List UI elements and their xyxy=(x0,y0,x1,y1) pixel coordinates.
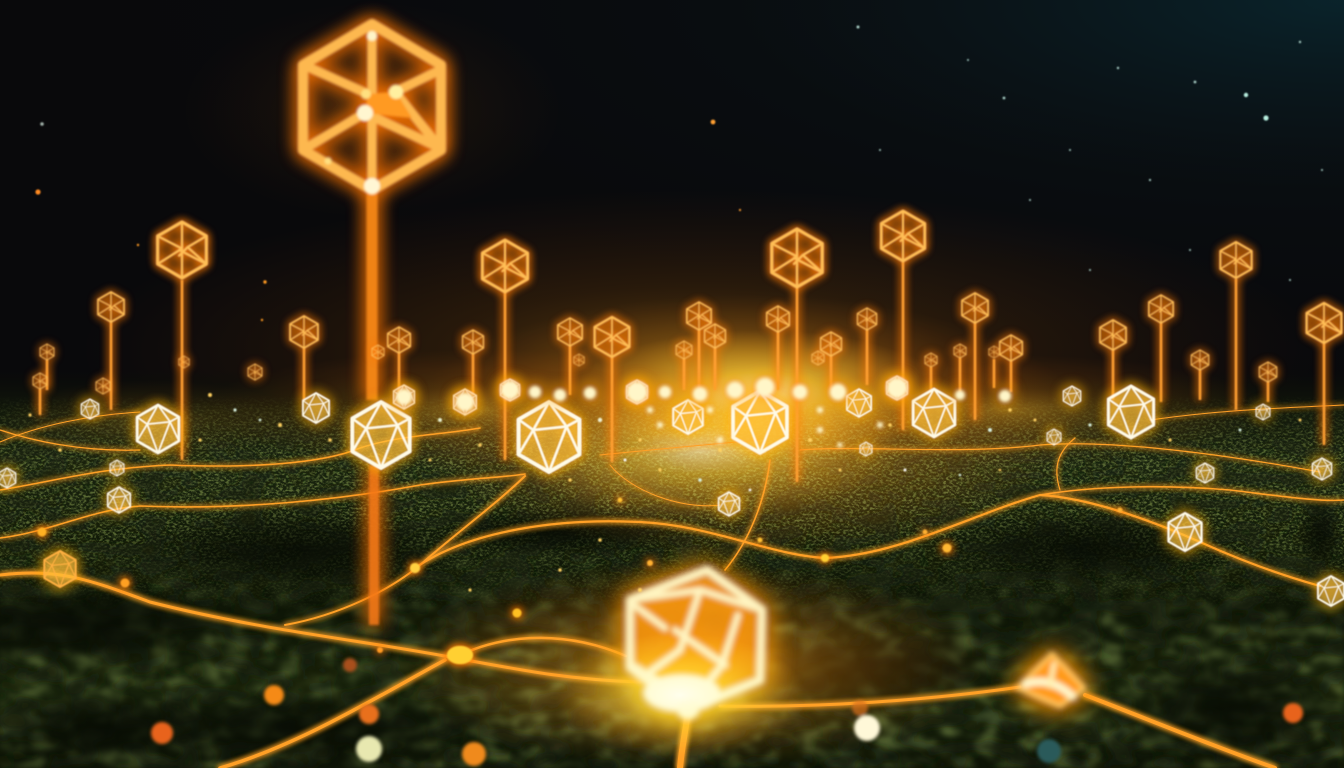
glowing blobs along the horizon xyxy=(396,378,1011,448)
orange foreground crystal xyxy=(1018,654,1084,706)
sparkle dots across the field xyxy=(28,393,1301,592)
glowing nodes on trails xyxy=(38,498,1122,664)
pole row right xyxy=(925,242,1341,445)
pole row centre xyxy=(558,211,925,482)
dark moss clumps xyxy=(0,499,1344,768)
bright flare beneath the foreground crystal xyxy=(555,633,805,757)
bright crystals on the ground xyxy=(0,376,1344,606)
field of smaller poles with hexagon heads xyxy=(33,211,1341,482)
orange crystal at left trail xyxy=(44,551,76,587)
pole row left xyxy=(33,222,528,460)
mossy ground xyxy=(0,370,1344,768)
foreground bokeh lights xyxy=(151,658,1303,766)
network light trails xyxy=(0,405,1344,768)
large foreground crystal xyxy=(630,570,762,719)
horizon glow xyxy=(0,295,1270,768)
scattered stars xyxy=(35,26,1323,321)
large hero pole with wireframe hexagon xyxy=(303,24,441,625)
